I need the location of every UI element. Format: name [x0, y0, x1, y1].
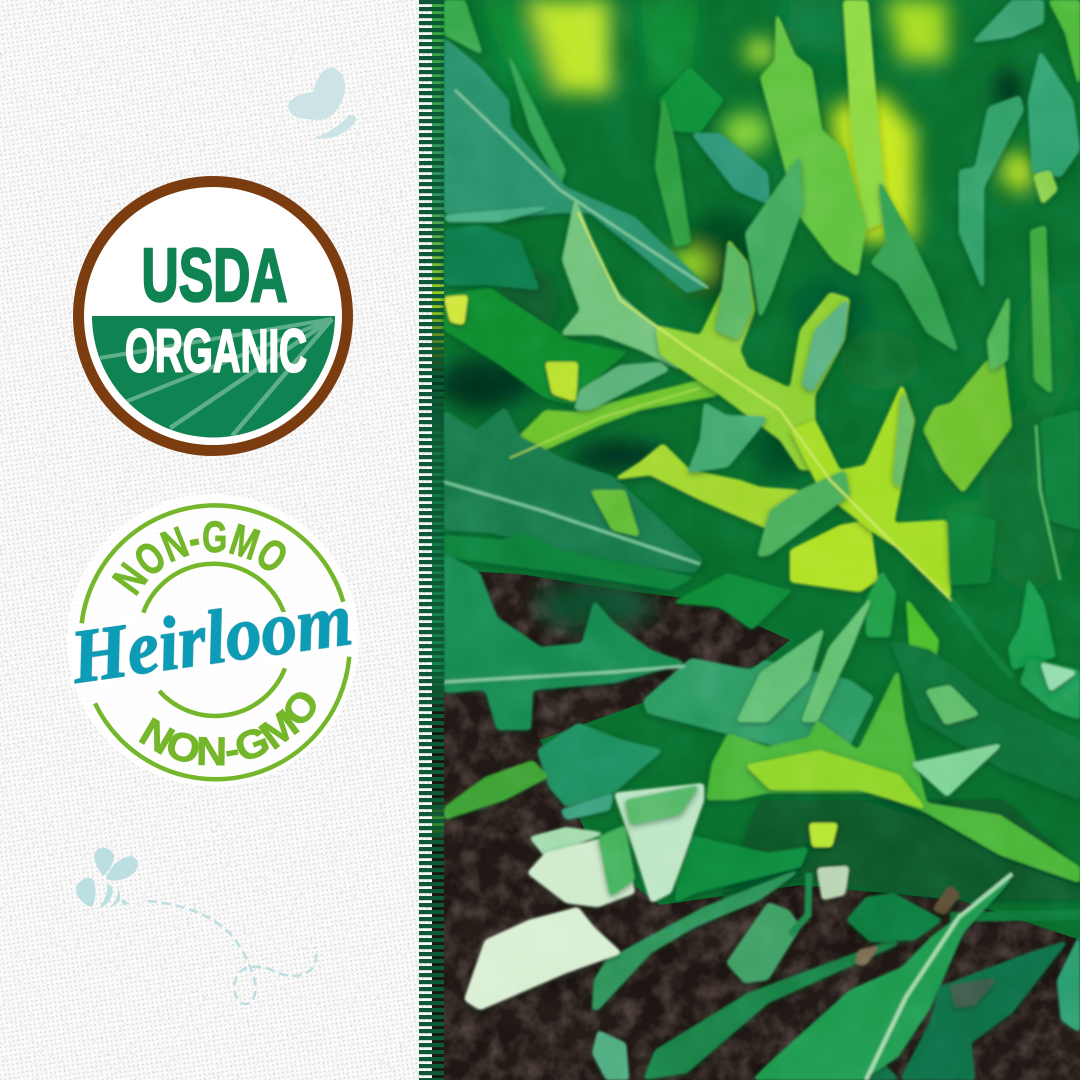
leaves: left middle [444, 288, 793, 730]
Heirloom script: Heirloom [65, 577, 357, 700]
leaves: upper background [444, 0, 1080, 395]
leaf midribs [444, 90, 708, 682]
USDA text: USDA [142, 233, 288, 317]
flight path [148, 901, 316, 1004]
NON-GMO top: NON-GMO [112, 520, 286, 596]
striped divider [419, 0, 444, 1080]
leaves: lower cluster [444, 593, 1080, 1080]
bee [76, 848, 138, 908]
panel: fabric background [0, 0, 432, 1080]
soil [444, 560, 1080, 1080]
badge: Non-GMO Heirloom [65, 494, 359, 786]
icon: bee with dashed flight path [76, 848, 316, 1004]
NON-GMO bottom: NON-GMO [138, 692, 316, 766]
ring [78, 182, 348, 450]
icon: butterfly [288, 68, 356, 139]
photo: arugula leaves growing in soil [432, 0, 1080, 1080]
halo [67, 494, 359, 786]
badge: USDA Organic [78, 182, 348, 450]
leaves: right cluster [866, 292, 1080, 800]
arcs [82, 505, 349, 779]
leaves: main bright arugula leaf [560, 197, 951, 600]
ORGANIC text: ORGANIC [125, 318, 307, 384]
green field [90, 316, 340, 441]
